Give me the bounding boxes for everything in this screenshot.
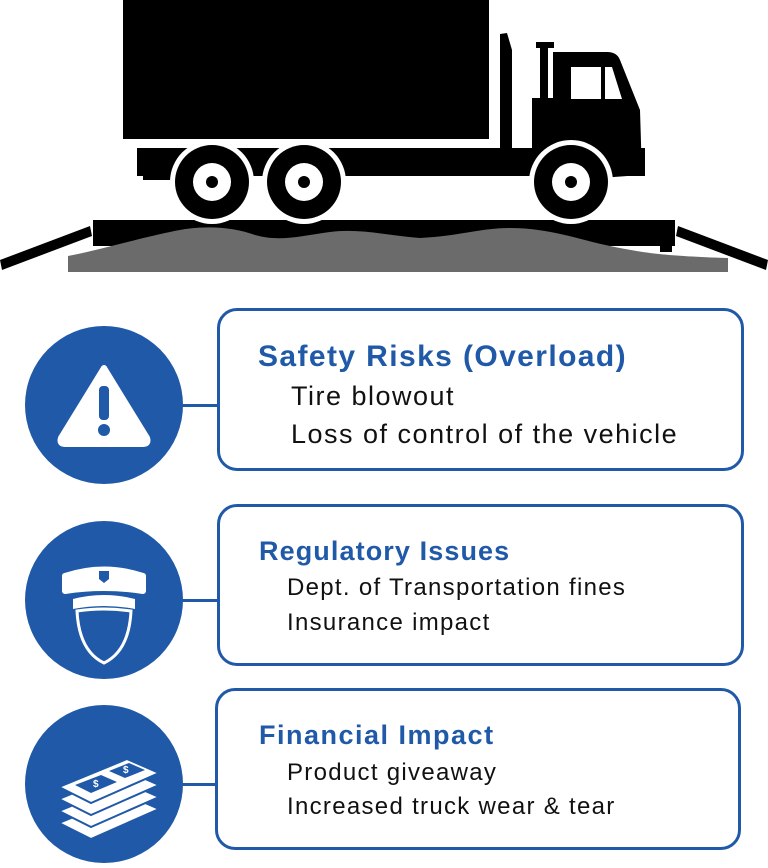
text: regulatory items: Insurance impact xyxy=(287,609,491,636)
gravel mound xyxy=(68,227,728,272)
text: financial items: Product giveaway xyxy=(287,759,497,786)
panel: regulatory xyxy=(217,504,744,666)
text: financial items: Increased truck wear & tear xyxy=(287,793,616,820)
text: regulatory items: Dept. of Transportation fines xyxy=(287,574,626,601)
icon: police cap xyxy=(25,521,183,679)
icon: money stack: $ xyxy=(93,779,99,790)
connector lines xyxy=(182,404,217,786)
heading: financial: Financial Impact xyxy=(259,720,495,750)
truck on scale illustration xyxy=(0,0,768,272)
icon: warning xyxy=(25,326,183,484)
icon: money stack xyxy=(25,705,183,863)
panel: financial xyxy=(215,688,741,850)
text: safety items: Tire blowout xyxy=(291,381,455,411)
icon: money stack: $ xyxy=(123,765,129,776)
wheels xyxy=(170,140,613,224)
ramps xyxy=(0,226,768,270)
text: financial items xyxy=(287,759,616,820)
text: safety items xyxy=(291,381,678,449)
truck body xyxy=(123,0,645,180)
scale platform xyxy=(93,220,675,252)
text: regulatory items xyxy=(287,574,626,636)
heading: regulatory: Regulatory Issues xyxy=(259,536,510,566)
panel: safety risks xyxy=(217,308,744,471)
text: safety items: Loss of control of the vehicle xyxy=(291,419,678,449)
heading: safety: Safety Risks (Overload) xyxy=(258,340,627,373)
